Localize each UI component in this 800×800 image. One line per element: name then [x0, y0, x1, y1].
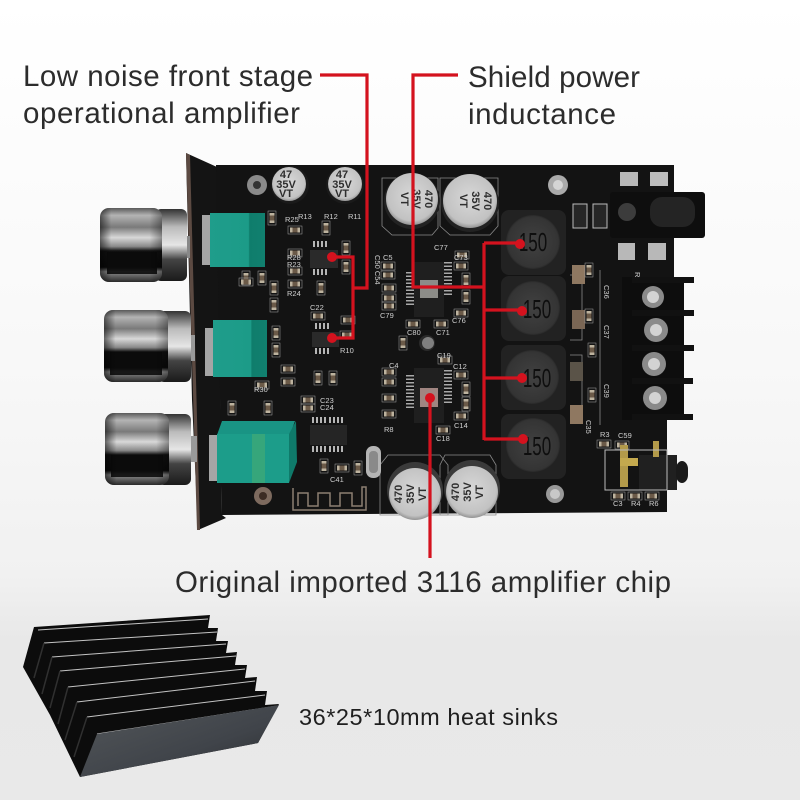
shielded power inductors: 150: [523, 431, 551, 461]
large capacitors 470uF 35V: 35V: [462, 482, 474, 502]
label: heat sink size: 36*25*10mm heat sinks: [299, 704, 558, 730]
silkscreen labels: R24: [287, 289, 301, 298]
silkscreen labels: C24: [320, 403, 334, 412]
small capacitors 47uF 35V: 35V: [276, 179, 296, 191]
silkscreen labels: C18: [436, 434, 450, 443]
silkscreen labels: C50 C54: [373, 255, 382, 285]
label: low noise operational amplifier: operational amplifier: [23, 97, 300, 130]
crystal oscillator: [366, 446, 381, 478]
audio jack: [605, 441, 688, 490]
volume knobs: [100, 208, 197, 485]
silkscreen labels: C39: [602, 384, 611, 398]
potentiometer 3: [209, 421, 297, 483]
small capacitors 47uF 35V: 35V: [332, 179, 352, 191]
small capacitors 47uF 35V: VT: [335, 188, 349, 200]
silkscreen labels: C36: [602, 285, 611, 299]
potentiometer 1: [202, 213, 265, 267]
large capacitors 470uF 35V: 35V: [469, 191, 481, 211]
silkscreen labels: C41: [330, 475, 344, 484]
large capacitors 470uF 35V: 470: [481, 192, 493, 210]
silkscreen labels: R6: [649, 499, 659, 508]
silkscreen labels: C79: [380, 311, 394, 320]
leader: amplifier chip: [425, 393, 435, 558]
silkscreen labels: [254, 212, 659, 508]
silkscreen labels: R8: [384, 425, 394, 434]
knob 3: [105, 413, 191, 485]
silkscreen labels: C3: [613, 499, 623, 508]
silkscreen labels: C22: [310, 303, 324, 312]
amplifier chips: [406, 262, 452, 423]
large capacitors 470uF 35V: 470: [422, 190, 434, 208]
large capacitors 470uF 35V: VT: [474, 485, 486, 499]
silkscreen labels: R28: [287, 253, 301, 262]
silkscreen labels: R11: [348, 212, 361, 221]
silkscreen labels: R14: [633, 272, 642, 286]
mounting holes: [247, 175, 568, 505]
label: shield power inductance: Shield power: [468, 61, 640, 94]
small surface mount parts: [228, 172, 668, 500]
amplifier circuit board photo: [100, 153, 705, 530]
potentiometer 2: [205, 320, 267, 377]
silkscreen labels: C59: [618, 431, 632, 440]
small capacitors 47uF 35V: 47: [280, 169, 292, 181]
label: low noise operational amplifier: Low noise front stage: [23, 60, 313, 93]
silkscreen labels: C35: [584, 420, 593, 434]
shielded power inductors: [501, 210, 566, 479]
silkscreen labels: C76: [452, 316, 466, 325]
label: amplifier chip: Original imported 3116 amplifier chip: [175, 566, 671, 599]
shielded power inductors: 150: [523, 363, 551, 393]
silkscreen labels: C73: [454, 253, 468, 262]
silkscreen labels: C12: [453, 362, 467, 371]
silkscreen labels: C23: [320, 396, 334, 405]
silkscreen labels: R4: [631, 499, 641, 508]
heat sink base plate: [80, 705, 279, 777]
large capacitors 470uF 35V: 35V: [410, 189, 422, 209]
icon: heat sink: [23, 615, 279, 777]
large capacitors 470uF 35V: VT: [457, 194, 469, 208]
silkscreen labels: R30: [254, 385, 268, 394]
callout lines: red leader lines: [320, 75, 528, 558]
knob 2: [104, 310, 191, 382]
large capacitors 470uF 35V: [384, 173, 500, 520]
knob 1: [100, 208, 187, 282]
label: shield power inductance: [468, 61, 640, 131]
silkscreen labels: C14: [454, 421, 468, 430]
silkscreen labels: C80: [407, 328, 421, 337]
small capacitors 47uF 35V: [271, 166, 364, 204]
metal bracket: [186, 153, 226, 530]
DC power jack: [610, 192, 705, 238]
silkscreen labels: C4: [389, 361, 399, 370]
silkscreen labels: R13: [298, 212, 312, 221]
large capacitors 470uF 35V: VT: [398, 192, 410, 206]
label: shield power inductance: inductance: [468, 98, 616, 131]
silkscreen labels: R3: [600, 430, 610, 439]
silkscreen labels: C77: [434, 243, 448, 252]
large capacitors 470uF 35V: VT: [417, 487, 429, 501]
shielded power inductors: 150: [519, 227, 547, 257]
small capacitors 47uF 35V: 47: [336, 169, 348, 181]
shielded power inductors: 150: [523, 294, 551, 324]
potentiometers: [202, 213, 297, 483]
capacitor silkscreen outlines: [380, 178, 600, 515]
label: low noise operational amplifier: [23, 60, 313, 130]
black PCB: [216, 165, 674, 515]
leader: operational amplifier: [320, 75, 367, 343]
silkscreen labels: C71: [436, 328, 450, 337]
screw terminal block: [622, 277, 694, 420]
operational amplifier chips: [310, 241, 347, 452]
heat sink fins: [38, 619, 277, 734]
silkscreen labels: R23: [287, 260, 301, 269]
silkscreen labels: R12: [324, 212, 338, 221]
large capacitors 470uF 35V: 35V: [405, 484, 417, 504]
silkscreen labels: C37: [602, 325, 611, 339]
bluetooth antenna trace: [293, 487, 366, 510]
small capacitors 47uF 35V: VT: [279, 188, 293, 200]
large capacitors 470uF 35V: 470: [450, 483, 462, 501]
leader: shield power inductance: [413, 75, 528, 444]
silkscreen labels: R25: [285, 215, 299, 224]
silkscreen labels: R10: [340, 346, 354, 355]
silkscreen labels: C5: [383, 253, 393, 262]
large capacitors 470uF 35V: 470: [393, 485, 405, 503]
silkscreen labels: C19: [437, 351, 451, 360]
